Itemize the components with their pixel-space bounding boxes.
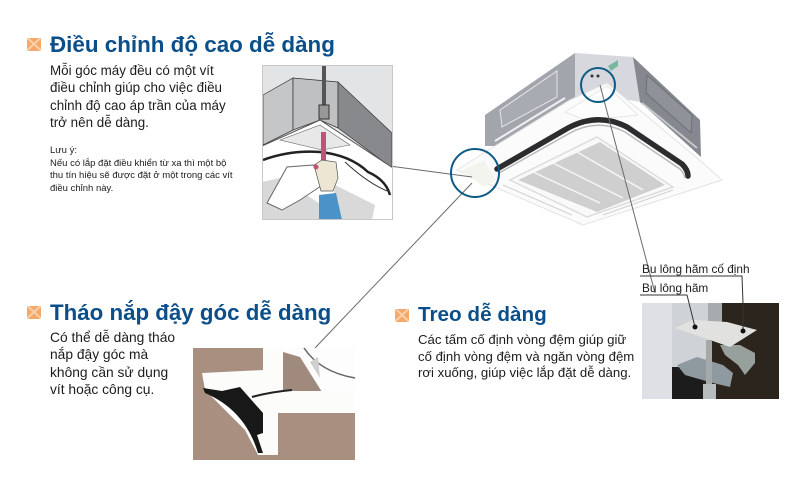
leader lines <box>315 85 655 348</box>
text: hanging description: rơi xuống, giúp việc lắp đặt dễ dàng. <box>418 365 631 380</box>
left body face <box>485 53 575 146</box>
text: corner cover description: vít hoặc công cụ. <box>50 382 154 397</box>
inset: bolt photo <box>642 303 779 399</box>
text: note: Lưu ý: <box>50 145 77 156</box>
cassette air conditioner unit <box>457 53 722 225</box>
inset: height adjustment <box>262 65 393 220</box>
text: height adjustment description <box>50 62 226 130</box>
text: corner cover description: không cần sử dụng <box>50 365 168 380</box>
icon: bullet height adjustment <box>27 38 41 51</box>
inset: corner cover photo <box>193 348 355 460</box>
label: lock bolt: Bu lông hãm <box>642 281 708 295</box>
text: corner cover description: nắp đậy góc mà <box>50 347 148 362</box>
icon: bullet corner cover <box>27 306 41 319</box>
black louver ring <box>497 120 688 176</box>
text: note <box>50 145 233 194</box>
icon: bullet hanging <box>395 309 409 322</box>
text: hanging description <box>418 332 634 380</box>
heading: height adjustment: Điều chỉnh độ cao dễ dàng <box>50 32 335 57</box>
text: hanging description: Các tấm cố định vòng đệm giúp giữ <box>418 332 626 347</box>
text: note: điều chỉnh này. <box>50 182 113 194</box>
text: note: Nếu có lắp đặt điều khiển từ xa thì một bộ <box>50 158 226 168</box>
text: corner cover description: Có thể dễ dàng tháo <box>50 330 175 345</box>
text: corner cover description <box>50 330 175 397</box>
front body face <box>575 53 640 102</box>
detail circles <box>451 68 615 197</box>
text: hanging description: cố định vòng đệm và ngăn vòng đệm <box>418 348 634 364</box>
text: height adjustment description: trở nên dễ dàng. <box>50 115 149 130</box>
text: note: thu tín hiệu sẽ được đặt ở một trong các vít <box>50 170 233 181</box>
white panel <box>457 83 722 225</box>
label: fixing lock bolt: Bu lông hãm cố định <box>642 262 750 276</box>
bolt label lines <box>640 276 743 331</box>
heading: corner cover: Tháo nắp đậy góc dễ dàng <box>50 300 331 325</box>
right body face <box>633 57 701 157</box>
heading: easy hanging: Treo dễ dàng <box>418 303 547 326</box>
text: height adjustment description: điều chỉnh giúp cho việc điều <box>50 80 222 95</box>
intake grille <box>510 137 673 217</box>
text: height adjustment description: Mỗi góc máy đều có một vít <box>50 63 214 78</box>
text: height adjustment description: chỉnh độ cao áp trần của máy <box>50 98 226 113</box>
